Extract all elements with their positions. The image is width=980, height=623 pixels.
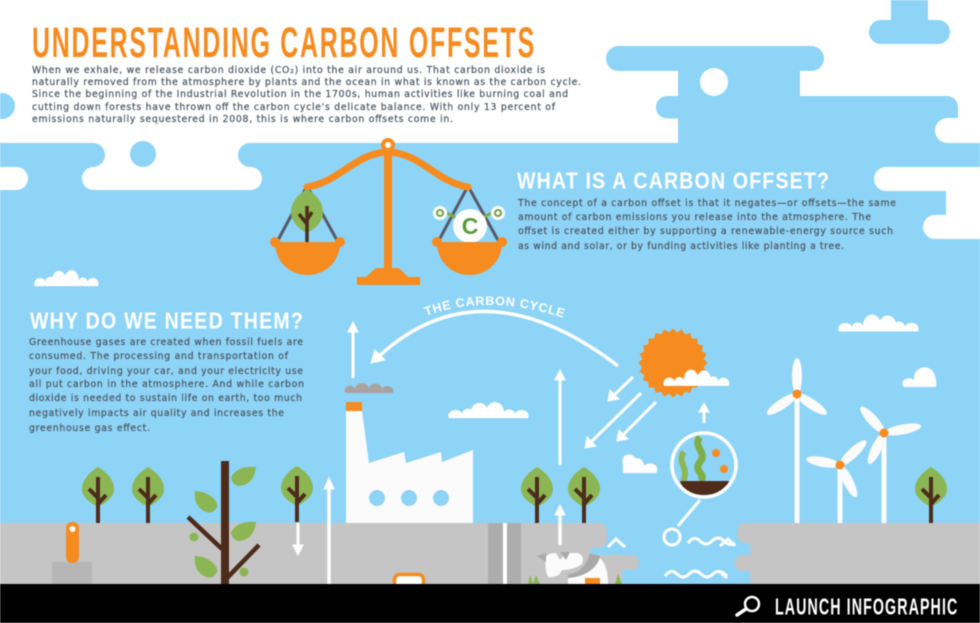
carbon molecule [433, 206, 505, 243]
text: why do we need them: greenhouse gas effect. [29, 423, 150, 434]
wind turbine 2 [805, 437, 870, 523]
intro text: Since the beginning of the Industrial Revolution in the 1700s, human activities like burning coal and [32, 89, 568, 100]
cow [528, 552, 622, 584]
blue dot at left edge [0, 93, 15, 119]
intro text: When we exhale, we release carbon dioxide (CO₂) into the air around us. That carbon dioxide is [32, 65, 545, 76]
magnifying lens with algae [664, 433, 736, 545]
text: why do we need them: Greenhouse gases are created when fossil fuels are [29, 337, 303, 348]
road [488, 523, 521, 584]
arrow up from cow [555, 505, 565, 545]
smoke [345, 383, 393, 393]
carbon cycle label: THE CARBON CYCLE [422, 296, 566, 318]
text: what is a carbon offset: The concept of a carbon offset is that it negates—or offsets—the same [517, 198, 896, 209]
small blue cloud top right [869, 0, 950, 44]
large tree [188, 461, 259, 584]
text: why do we need them: all put carbon in the atmosphere. And while carbon [29, 379, 304, 390]
text: what is a carbon offset: as wind and solar, or by funding activities like planting a tree. [518, 241, 844, 252]
arrow up above factory [348, 322, 358, 378]
sun [638, 328, 708, 398]
title: UNDERSTANDING CARBON OFFSETS [32, 19, 534, 67]
text: why do we need them: negatively impacts air quality and increases the [29, 408, 284, 419]
grass [528, 574, 622, 584]
arrow up from trees [555, 370, 565, 465]
intro text [32, 65, 581, 125]
intro text: naturally removed from the atmosphere by plants and the ocean in what is known as the carbon cycle. [32, 77, 581, 88]
tiny cloud near lens [622, 454, 657, 473]
heading: why do we need them: WHY DO WE NEED THEM? [30, 308, 303, 334]
text: what is a carbon offset [517, 198, 896, 252]
orange particles [712, 449, 720, 457]
tree 6 [915, 467, 947, 523]
large blue cloud upper right [606, 46, 980, 144]
small cloud center [448, 402, 529, 418]
left pan [270, 237, 345, 275]
lens handle [678, 500, 700, 526]
arrow up to sun cloud [699, 403, 709, 423]
arrows from sun [585, 377, 656, 448]
small cloud upper right [838, 315, 919, 332]
water waves [608, 538, 735, 578]
tree 3 [281, 466, 313, 522]
tree 1 [82, 467, 114, 523]
small cloud left [34, 270, 98, 286]
text: why do we need them [29, 337, 304, 434]
soil [680, 481, 729, 495]
heading: what is a carbon offset: WHAT IS A CARBON OFFSET? [517, 168, 829, 194]
text: why do we need them: consumed. The processing and transportation of [29, 351, 289, 362]
pump [52, 522, 92, 584]
arrow up left of factory [324, 478, 334, 584]
cloud over sun [663, 370, 729, 386]
tree 2 [132, 467, 164, 523]
icon: magnifier [737, 597, 759, 615]
car [394, 574, 424, 588]
chimney cap [346, 402, 362, 411]
wind turbine 1 [764, 358, 829, 523]
right pan [432, 237, 507, 275]
text: what is a carbon offset: offset is created either by supporting a renewable-energy source such [518, 226, 893, 237]
launch label: LAUNCH INFOGRAPHIC [775, 595, 957, 621]
text: what is a carbon offset: amount of carbon emissions you release into the atmosphere. The [518, 212, 871, 223]
tiny cloud right [902, 367, 936, 387]
white clouds at left of sky edge [0, 141, 738, 190]
carbon molecule: C [462, 213, 478, 239]
tree 4 [521, 467, 553, 523]
intro text: cutting down forests have thrown off the carbon cycle's delicate balance. With only 13 percent of [32, 102, 556, 113]
wind turbine 3 [857, 404, 922, 523]
trees row [82, 466, 947, 523]
scale strings [277, 186, 499, 242]
tree 5 [568, 467, 600, 523]
arrow down below tree [293, 523, 303, 555]
scale beam [307, 152, 468, 187]
leaves [190, 467, 256, 579]
carbon cycle arc arrow [371, 311, 618, 366]
algae [698, 437, 702, 481]
balance scale [270, 140, 507, 285]
factory [346, 402, 473, 523]
white cloud right edge [874, 167, 980, 239]
sky background [0, 143, 980, 623]
intro text: emissions naturally sequestered in 2008, this is where carbon offsets come in. [32, 114, 453, 125]
text: why do we need them: dioxide is needed to sustain life on earth, too much [29, 393, 302, 404]
factory windows [369, 490, 449, 506]
launch bar [0, 584, 980, 623]
scale post and base [357, 150, 420, 285]
ground left [0, 523, 639, 584]
tree on left pan [291, 189, 323, 242]
ground right [735, 523, 980, 584]
scale pivot ring [383, 140, 393, 150]
text: why do we need them: your food, driving your car, and your electricity use [29, 366, 303, 377]
